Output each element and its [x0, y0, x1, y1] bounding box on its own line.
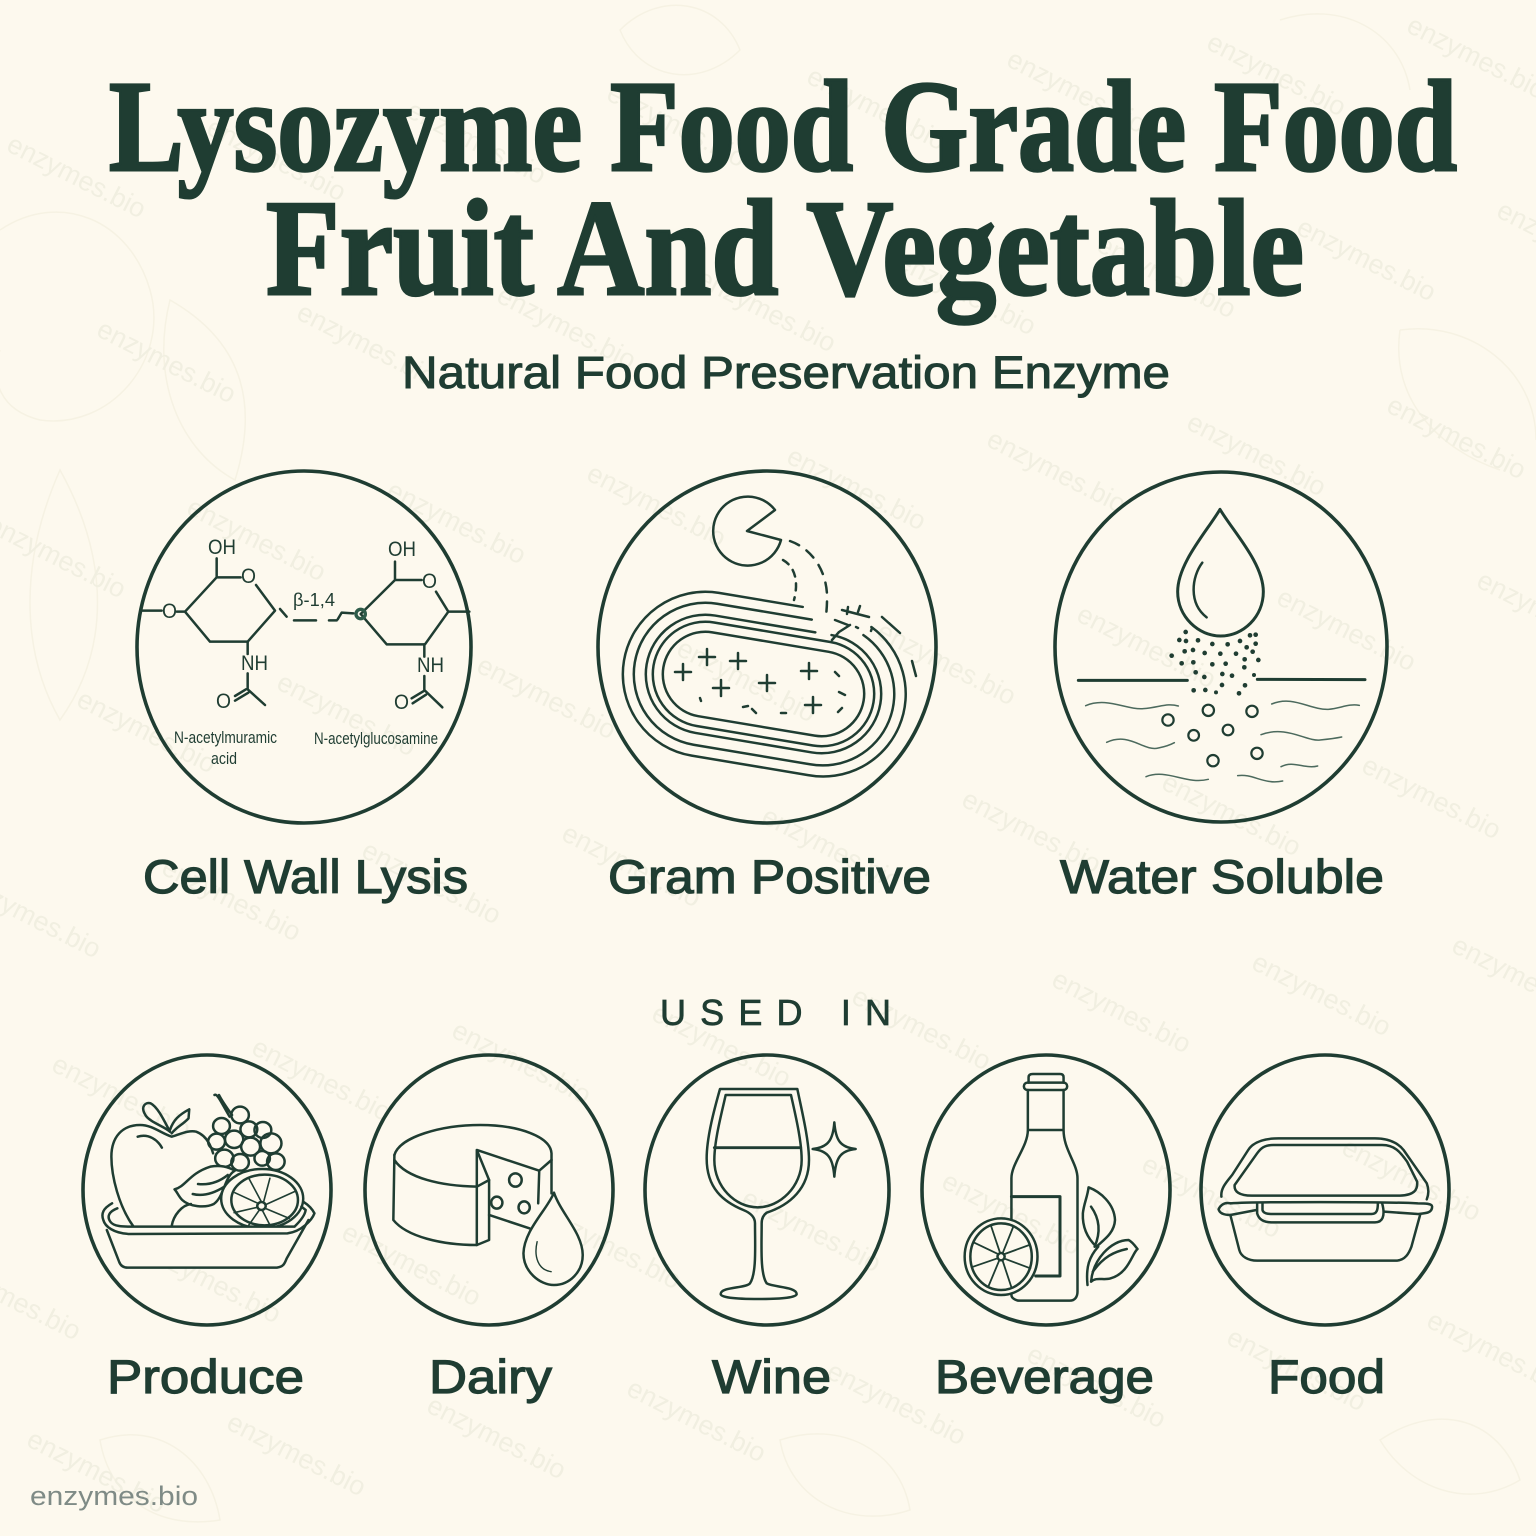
- watermark pattern: enzymes.bio: [472, 650, 621, 745]
- watermark pattern: enzymes.bio: [647, 998, 796, 1093]
- chemical labels: β-1,4: [293, 590, 335, 610]
- watermark pattern: enzymes.bio: [272, 667, 421, 762]
- watermark pattern: enzymes.bio: [337, 1217, 486, 1312]
- watermark pattern: enzymes.bio: [1357, 750, 1506, 845]
- watermark pattern: enzymes.bio: [1002, 44, 1151, 139]
- icon: bottle with citrus and leaves: [965, 1074, 1137, 1301]
- icon: water drop with powder: [1078, 509, 1365, 782]
- label: gram positive: Gram Positive: [608, 850, 931, 903]
- watermark pattern: enzymes.bio: [1382, 390, 1531, 485]
- title: Fruit And Vegetable: [266, 172, 1304, 324]
- watermark pattern: enzymes.bio: [357, 835, 506, 930]
- title: [109, 55, 1457, 324]
- chemical labels: NH: [241, 652, 268, 675]
- watermark pattern: enzymes.bio: [622, 1373, 771, 1468]
- chemical labels: O: [422, 570, 437, 593]
- watermark pattern: enzymes.bio: [872, 616, 1021, 711]
- watermark pattern: enzymes.bio: [492, 280, 641, 375]
- heading: used in: USED IN: [660, 992, 891, 1033]
- watermark pattern: enzymes.bio: [822, 1356, 971, 1451]
- watermark pattern: enzymes.bio: [292, 297, 441, 392]
- label: food: Food: [1268, 1350, 1385, 1403]
- chemical labels: [162, 536, 444, 768]
- watermark pattern: enzymes.bio: [402, 95, 551, 190]
- subtitle: Natural Food Preservation Enzyme: [402, 347, 1170, 398]
- watermark pattern: enzymes.bio: [222, 1407, 371, 1502]
- chemical labels: N-acetylglucosamine: [314, 729, 438, 748]
- chemical labels: O: [162, 600, 177, 623]
- panel: gram positive: [598, 471, 936, 823]
- label: cell wall lysis: Cell Wall Lysis: [143, 850, 468, 903]
- icon: peptidoglycan structure: [142, 558, 469, 707]
- chemical labels: acid: [211, 749, 237, 768]
- chemical labels: O: [394, 691, 409, 714]
- watermark pattern: enzymes.bio: [937, 1166, 1086, 1261]
- chemical labels: OH: [208, 536, 236, 559]
- watermark pattern: enzymes.bio: [1157, 767, 1306, 862]
- watermark pattern: enzymes.bio: [22, 1424, 171, 1519]
- watermark pattern: enzymes.bio: [1292, 212, 1441, 307]
- icon: bacterial cell wall layers: [610, 579, 918, 789]
- watermark pattern: enzymes.bio: [672, 633, 821, 728]
- watermark pattern: enzymes.bio: [802, 61, 951, 156]
- panel: beverage: [922, 1055, 1170, 1325]
- watermark pattern: enzymes.bio: [382, 475, 531, 570]
- icon: positive charges and fragments: [675, 606, 916, 713]
- watermark pattern: enzymes.bio: [982, 424, 1131, 519]
- chemical labels: O: [241, 565, 256, 588]
- chemical labels: O: [216, 690, 231, 713]
- chemical labels: N-acetylmuramic: [174, 728, 277, 747]
- panel: dairy: [365, 1055, 613, 1325]
- watermark pattern: enzymes.bio: [1072, 599, 1221, 694]
- watermark pattern: enzymes.bio: [557, 818, 706, 913]
- watermark pattern: enzymes.bio: [47, 1049, 196, 1144]
- footer brand: enzymes.bio: [30, 1481, 198, 1511]
- label: water soluble: Water Soluble: [1060, 850, 1384, 903]
- watermark pattern: enzymes.bio: [182, 492, 331, 587]
- icon: wine glass with sparkle: [707, 1089, 856, 1299]
- watermark pattern: enzymes.bio: [1247, 947, 1396, 1042]
- watermark pattern: enzymes.bio: [72, 684, 221, 779]
- icon: food container: [1219, 1138, 1432, 1261]
- panel: food: [1201, 1055, 1449, 1325]
- icon: cheese wheel and drop: [393, 1125, 583, 1285]
- watermark pattern: enzymes.bio: [1337, 1132, 1486, 1227]
- chemical labels: NH: [417, 654, 444, 677]
- watermark pattern: enzymes.bio: [447, 1015, 596, 1110]
- label: wine: Wine: [712, 1350, 831, 1403]
- watermark pattern: enzymes.bio: [1182, 407, 1331, 502]
- watermark pattern: enzymes.bio: [247, 1032, 396, 1127]
- watermark pattern: enzymes.bio: [2, 129, 151, 224]
- chemical labels: OH: [388, 538, 416, 561]
- watermark pattern: enzymes.bio: [1022, 1339, 1171, 1434]
- watermark pattern: enzymes.bio: [137, 1234, 286, 1329]
- panel: produce: [83, 1055, 331, 1325]
- watermark pattern: enzymes.bio: [782, 441, 931, 536]
- watermark pattern: enzymes.bio: [157, 852, 306, 947]
- watermark pattern: enzymes.bio: [692, 263, 841, 358]
- watermark pattern: enzymes.bio: [957, 784, 1106, 879]
- watermark pattern: enzymes.bio: [1222, 1322, 1371, 1417]
- watermark pattern: enzymes.bio: [737, 1183, 886, 1278]
- watermark pattern: enzymes.bio: [847, 981, 996, 1076]
- icon: enzyme pacman: [713, 497, 781, 566]
- watermark pattern: enzymes.bio: [1047, 964, 1196, 1059]
- watermark pattern: enzymes.bio: [892, 246, 1041, 341]
- watermark pattern: enzymes.bio: [602, 78, 751, 173]
- watermark pattern: enzymes.bio: [537, 1200, 686, 1295]
- watermark pattern: enzymes.bio: [757, 801, 906, 896]
- label: beverage: Beverage: [935, 1350, 1154, 1403]
- icon: fruit basket: [102, 1095, 314, 1268]
- panel: wine: [645, 1055, 889, 1325]
- watermark pattern: enzymes.bio: [1092, 229, 1241, 324]
- watermark pattern: enzymes.bio: [1202, 27, 1351, 122]
- watermark pattern: enzymes.bio: [1137, 1149, 1286, 1244]
- watermark pattern: enzymes.bio: [1272, 582, 1421, 677]
- panel: water soluble: [1055, 472, 1387, 822]
- watermark pattern: enzymes.bio: [92, 314, 241, 409]
- watermark pattern: enzymes.bio: [202, 112, 351, 207]
- label: produce: Produce: [107, 1350, 304, 1403]
- panel: cell wall lysis: [137, 471, 471, 823]
- icon: dashed enzyme paths: [783, 541, 827, 618]
- watermark pattern: enzymes.bio: [422, 1390, 571, 1485]
- watermark pattern: enzymes.bio: [582, 458, 731, 553]
- label: dairy: Dairy: [429, 1350, 553, 1403]
